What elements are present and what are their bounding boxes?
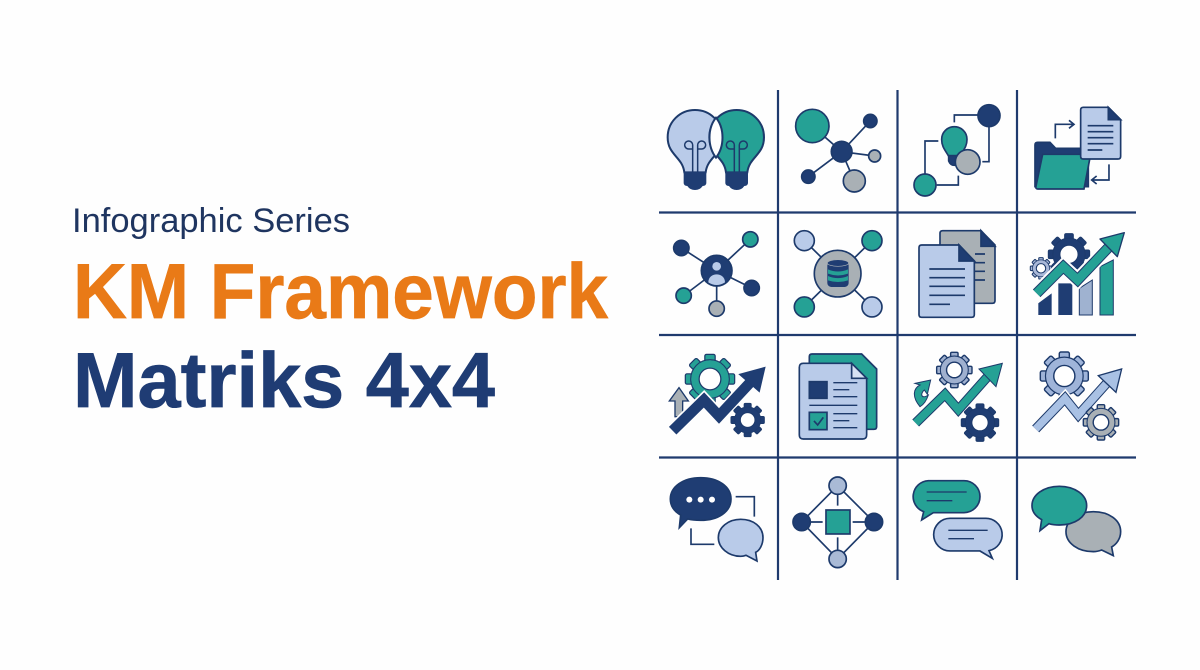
icon: twin light bulbs — [668, 110, 764, 190]
icon: gears with navy growth arrow — [669, 354, 765, 437]
icon: message bubbles with lines — [913, 481, 1002, 558]
icon: bulb with connected nodes — [914, 105, 1000, 196]
title line: KM Framework: KM Framework — [73, 247, 609, 335]
icon: teal arrow with gears — [914, 352, 1002, 441]
icon: network of circles — [796, 109, 881, 192]
heading block — [72, 202, 609, 424]
panel: 4x4 icon matrix — [659, 90, 1136, 580]
icon: database hub — [794, 231, 882, 317]
icon: report document with checklist — [799, 354, 877, 439]
icon: user network — [674, 232, 759, 316]
icon: chat bubbles with brackets — [670, 478, 763, 561]
icon: overlapping speech bubbles — [1032, 486, 1121, 556]
icon: stacked documents — [919, 231, 995, 317]
icon: folder and document exchange — [1035, 107, 1121, 189]
title line: Matriks 4x4: Matriks 4x4 — [73, 336, 495, 424]
subtitle: Infographic Series: Infographic Series — [72, 202, 350, 240]
icon: growth chart with gears — [1030, 233, 1124, 315]
icon: light blue arrow with gears — [1036, 352, 1122, 440]
icon: diamond flow diagram — [793, 477, 883, 568]
